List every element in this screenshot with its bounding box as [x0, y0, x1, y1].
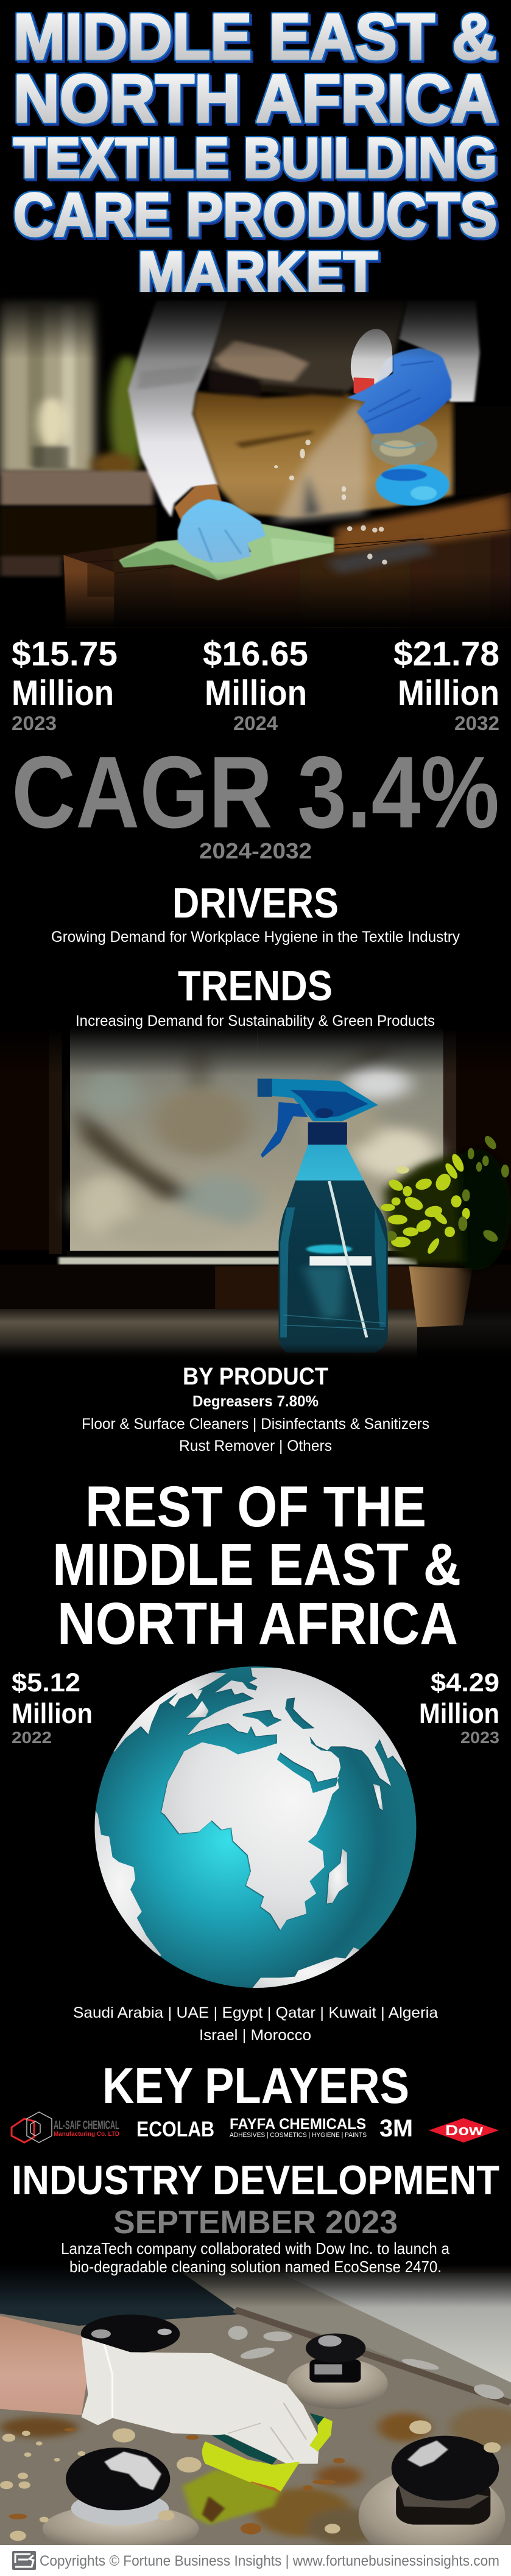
title: NORTH AFRICA [13, 61, 497, 136]
region value 2022: 2022 [12, 1728, 52, 1747]
key players heading: KEY PLAYERS [102, 2057, 409, 2114]
value 2023: Million [12, 673, 114, 713]
logo: Dow [429, 2118, 499, 2143]
drivers: Growing Demand for Workplace Hygiene in the Textile Industry [51, 928, 460, 946]
region value 2023: 2023 [460, 1728, 499, 1747]
market values: 2023, 2024, 2032 [12, 634, 499, 734]
region heading: MIDDLE EAST & [52, 1531, 461, 1598]
key player logos [12, 2112, 499, 2143]
icon: Fortune Business Insights logo [12, 2551, 36, 2570]
logo: Fayfa Chemicals: FAYFA CHEMICALS [230, 2116, 366, 2133]
icon: globe [95, 1666, 417, 1988]
logo: Fayfa Chemicals: ADHESIVES | COSMETICS | HYGIENE | PAINTS [230, 2132, 367, 2139]
value 2023: 2023 [12, 712, 57, 734]
value 2032: 2032 [454, 712, 499, 734]
region value 2022 [12, 1668, 93, 1747]
region heading: REST OF THE [85, 1475, 426, 1539]
by product: Rust Remover | Others [179, 1437, 332, 1455]
value 2023: $15.75 [12, 634, 118, 673]
value 2032 [393, 634, 499, 734]
industry development [12, 2157, 499, 2276]
logo: Al-Saif Chemical: AL-SAIF CHEMICAL [54, 2119, 119, 2132]
trends: Increasing Demand for Sustainability & Green Products [76, 1013, 435, 1030]
by product [82, 1363, 429, 1455]
logo: Dow: Dow [445, 2122, 483, 2139]
logo: Al-Saif Chemical: Manufacturing Co. LTD [54, 2131, 119, 2138]
CAGR: 2024-2032 [199, 838, 312, 863]
region value 2023: Million [419, 1697, 499, 1729]
industry development: LanzaTech company collaborated with Dow Inc. to launch a [61, 2239, 449, 2258]
drivers [51, 879, 460, 946]
trends: TRENDS [178, 962, 333, 1009]
countries list: Saudi Arabia | UAE | Egypt | Qatar | Kuwait | Algeria [73, 2004, 438, 2021]
value 2024 [203, 634, 308, 734]
countries list [73, 2004, 438, 2044]
by product: Degreasers 7.80% [192, 1393, 319, 1410]
region heading [52, 1475, 461, 1657]
spray bottle [371, 423, 449, 506]
photo: gloved hand scrubbing stove top with sponge [0, 2261, 511, 2565]
countries list: Israel | Morocco [199, 2027, 311, 2044]
title [13, 1, 497, 305]
by product: BY PRODUCT [183, 1363, 328, 1390]
trends [76, 962, 435, 1030]
value 2032: $21.78 [393, 634, 499, 673]
footer [0, 2545, 511, 2576]
industry development: bio-degradable cleaning solution named EcoSense 2470. [69, 2258, 442, 2276]
logo: 3M: 3M [379, 2115, 413, 2142]
photo: blue spray bottle on window sill with plant [0, 1027, 511, 1362]
photo: worker spraying and wiping table with blue gloves [0, 292, 511, 627]
value 2032: Million [398, 673, 499, 713]
logo: Al-Saif Chemical [12, 2112, 119, 2143]
region value 2022: Million [12, 1697, 93, 1729]
industry development: SEPTEMBER 2023 [113, 2204, 398, 2241]
title: MARKET [138, 240, 378, 305]
logo: Ecolab: ECOLAB [136, 2118, 214, 2141]
value 2023 [12, 634, 118, 734]
value 2024: 2024 [233, 712, 278, 734]
plant [381, 1135, 511, 1271]
region value 2023: $4.29 [431, 1668, 499, 1697]
region value 2023 [419, 1668, 499, 1747]
value 2024: Million [205, 673, 307, 713]
by product: Floor & Surface Cleaners | Disinfectants & Sanitizers [82, 1416, 429, 1433]
region value 2022: $5.12 [12, 1668, 80, 1697]
drivers: DRIVERS [172, 879, 339, 927]
value 2024: $16.65 [203, 634, 308, 673]
region heading: NORTH AFRICA [57, 1590, 458, 1657]
title: MIDDLE EAST & [13, 1, 497, 73]
